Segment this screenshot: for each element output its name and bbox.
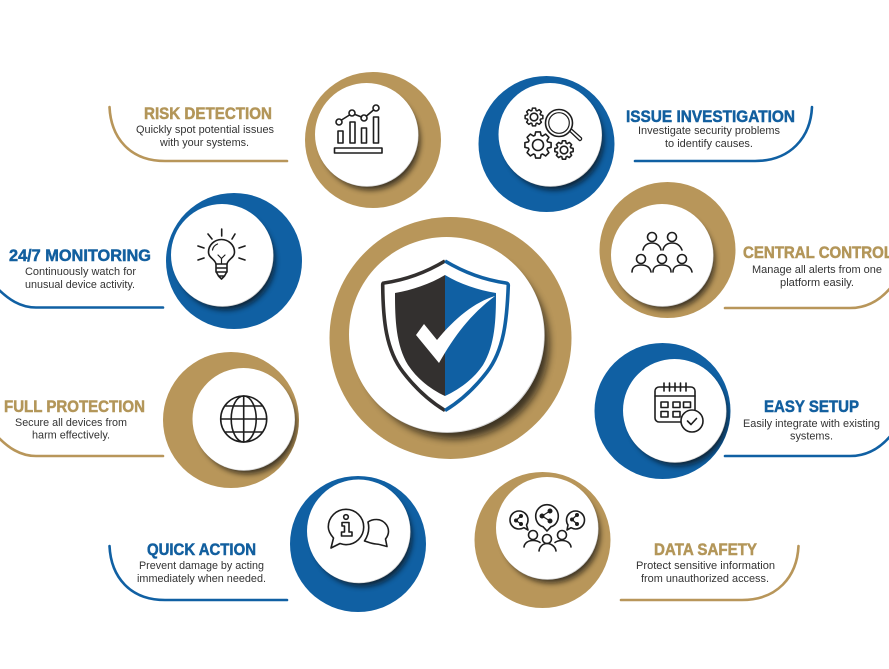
title: 24/7 monitoring: 24/7 MONITORING: [9, 247, 151, 265]
icon: people sharing speech bubbles: [510, 505, 584, 551]
title: risk detection: RISK DETECTION: [144, 105, 272, 123]
description: quick action: immediately when needed.: [137, 573, 266, 585]
title: data safety: DATA SAFETY: [654, 541, 757, 559]
central shield badge: [330, 217, 572, 459]
description: easy setup: systems.: [790, 430, 833, 442]
description: central control: platform easily.: [780, 277, 854, 289]
title: quick action: QUICK ACTION: [147, 541, 256, 559]
description: quick action: [137, 560, 266, 585]
icon: info speech bubbles: [328, 509, 388, 548]
title: easy setup: EASY SETUP: [764, 398, 859, 416]
description: risk detection: Quickly spot potential issues: [136, 124, 274, 136]
description: easy setup: [743, 418, 880, 442]
panel: easy setup: [594, 343, 889, 479]
description: quick action: Prevent damage by acting: [139, 560, 264, 572]
panel: quick action: [110, 476, 426, 612]
description: risk detection: [136, 124, 274, 149]
connector: quick action: [110, 546, 287, 600]
title: issue investigation: ISSUE INVESTIGATION: [626, 108, 795, 126]
description: data safety: Protect sensitive information: [636, 560, 775, 572]
description: risk detection: with your systems.: [159, 137, 249, 149]
badge: risk detection: [305, 72, 441, 208]
panel: 24/7 monitoring: [0, 193, 302, 329]
badge: 24/7 monitoring: [166, 193, 302, 329]
description: data safety: [636, 560, 775, 585]
panel: data safety: [474, 472, 798, 608]
badge: full protection: [163, 352, 299, 488]
description: central control: Manage all alerts from one: [752, 264, 882, 276]
description: easy setup: Easily integrate with existing: [743, 418, 880, 430]
panel: risk detection: [110, 72, 441, 208]
connector: issue investigation: [635, 107, 812, 161]
connector: data safety: [621, 546, 798, 600]
description: full protection: harm effectively.: [32, 430, 110, 442]
icon: gears and magnifier: [525, 108, 582, 159]
description: issue investigation: to identify causes.: [665, 138, 753, 150]
description: central control: [752, 264, 882, 289]
panel: issue investigation: [478, 76, 812, 212]
description: 24/7 monitoring: Continuously watch for: [25, 266, 136, 278]
description: 24/7 monitoring: unusual device activity.: [25, 279, 135, 291]
description: data safety: from unauthorized access.: [641, 573, 769, 585]
title: full protection: FULL PROTECTION: [4, 398, 145, 416]
icon: light bulb: [198, 229, 245, 279]
icon: group of people: [632, 232, 692, 272]
icon: bar chart with trend line: [334, 105, 382, 153]
icon: globe: [221, 396, 267, 442]
description: 24/7 monitoring: [25, 266, 136, 291]
icon: calendar with check: [655, 383, 703, 432]
description: issue investigation: [638, 125, 780, 150]
connector: central control: [725, 286, 889, 308]
badge: data safety: [474, 472, 610, 608]
connector: 24/7 monitoring: [0, 288, 163, 308]
description: full protection: [15, 417, 127, 442]
connector: easy setup: [725, 434, 889, 456]
description: issue investigation: Investigate security problems: [638, 125, 780, 137]
connector: risk detection: [110, 107, 287, 161]
panel: full protection: [0, 352, 299, 488]
badge: central control: [600, 182, 736, 318]
panel: central control: [600, 182, 889, 318]
icon: shield with check mark: [383, 261, 508, 410]
badge: issue investigation: [478, 76, 614, 212]
badge: easy setup: [594, 343, 730, 479]
description: full protection: Secure all devices from: [15, 417, 127, 429]
connector: full protection: [0, 436, 163, 456]
badge: quick action: [290, 476, 426, 612]
